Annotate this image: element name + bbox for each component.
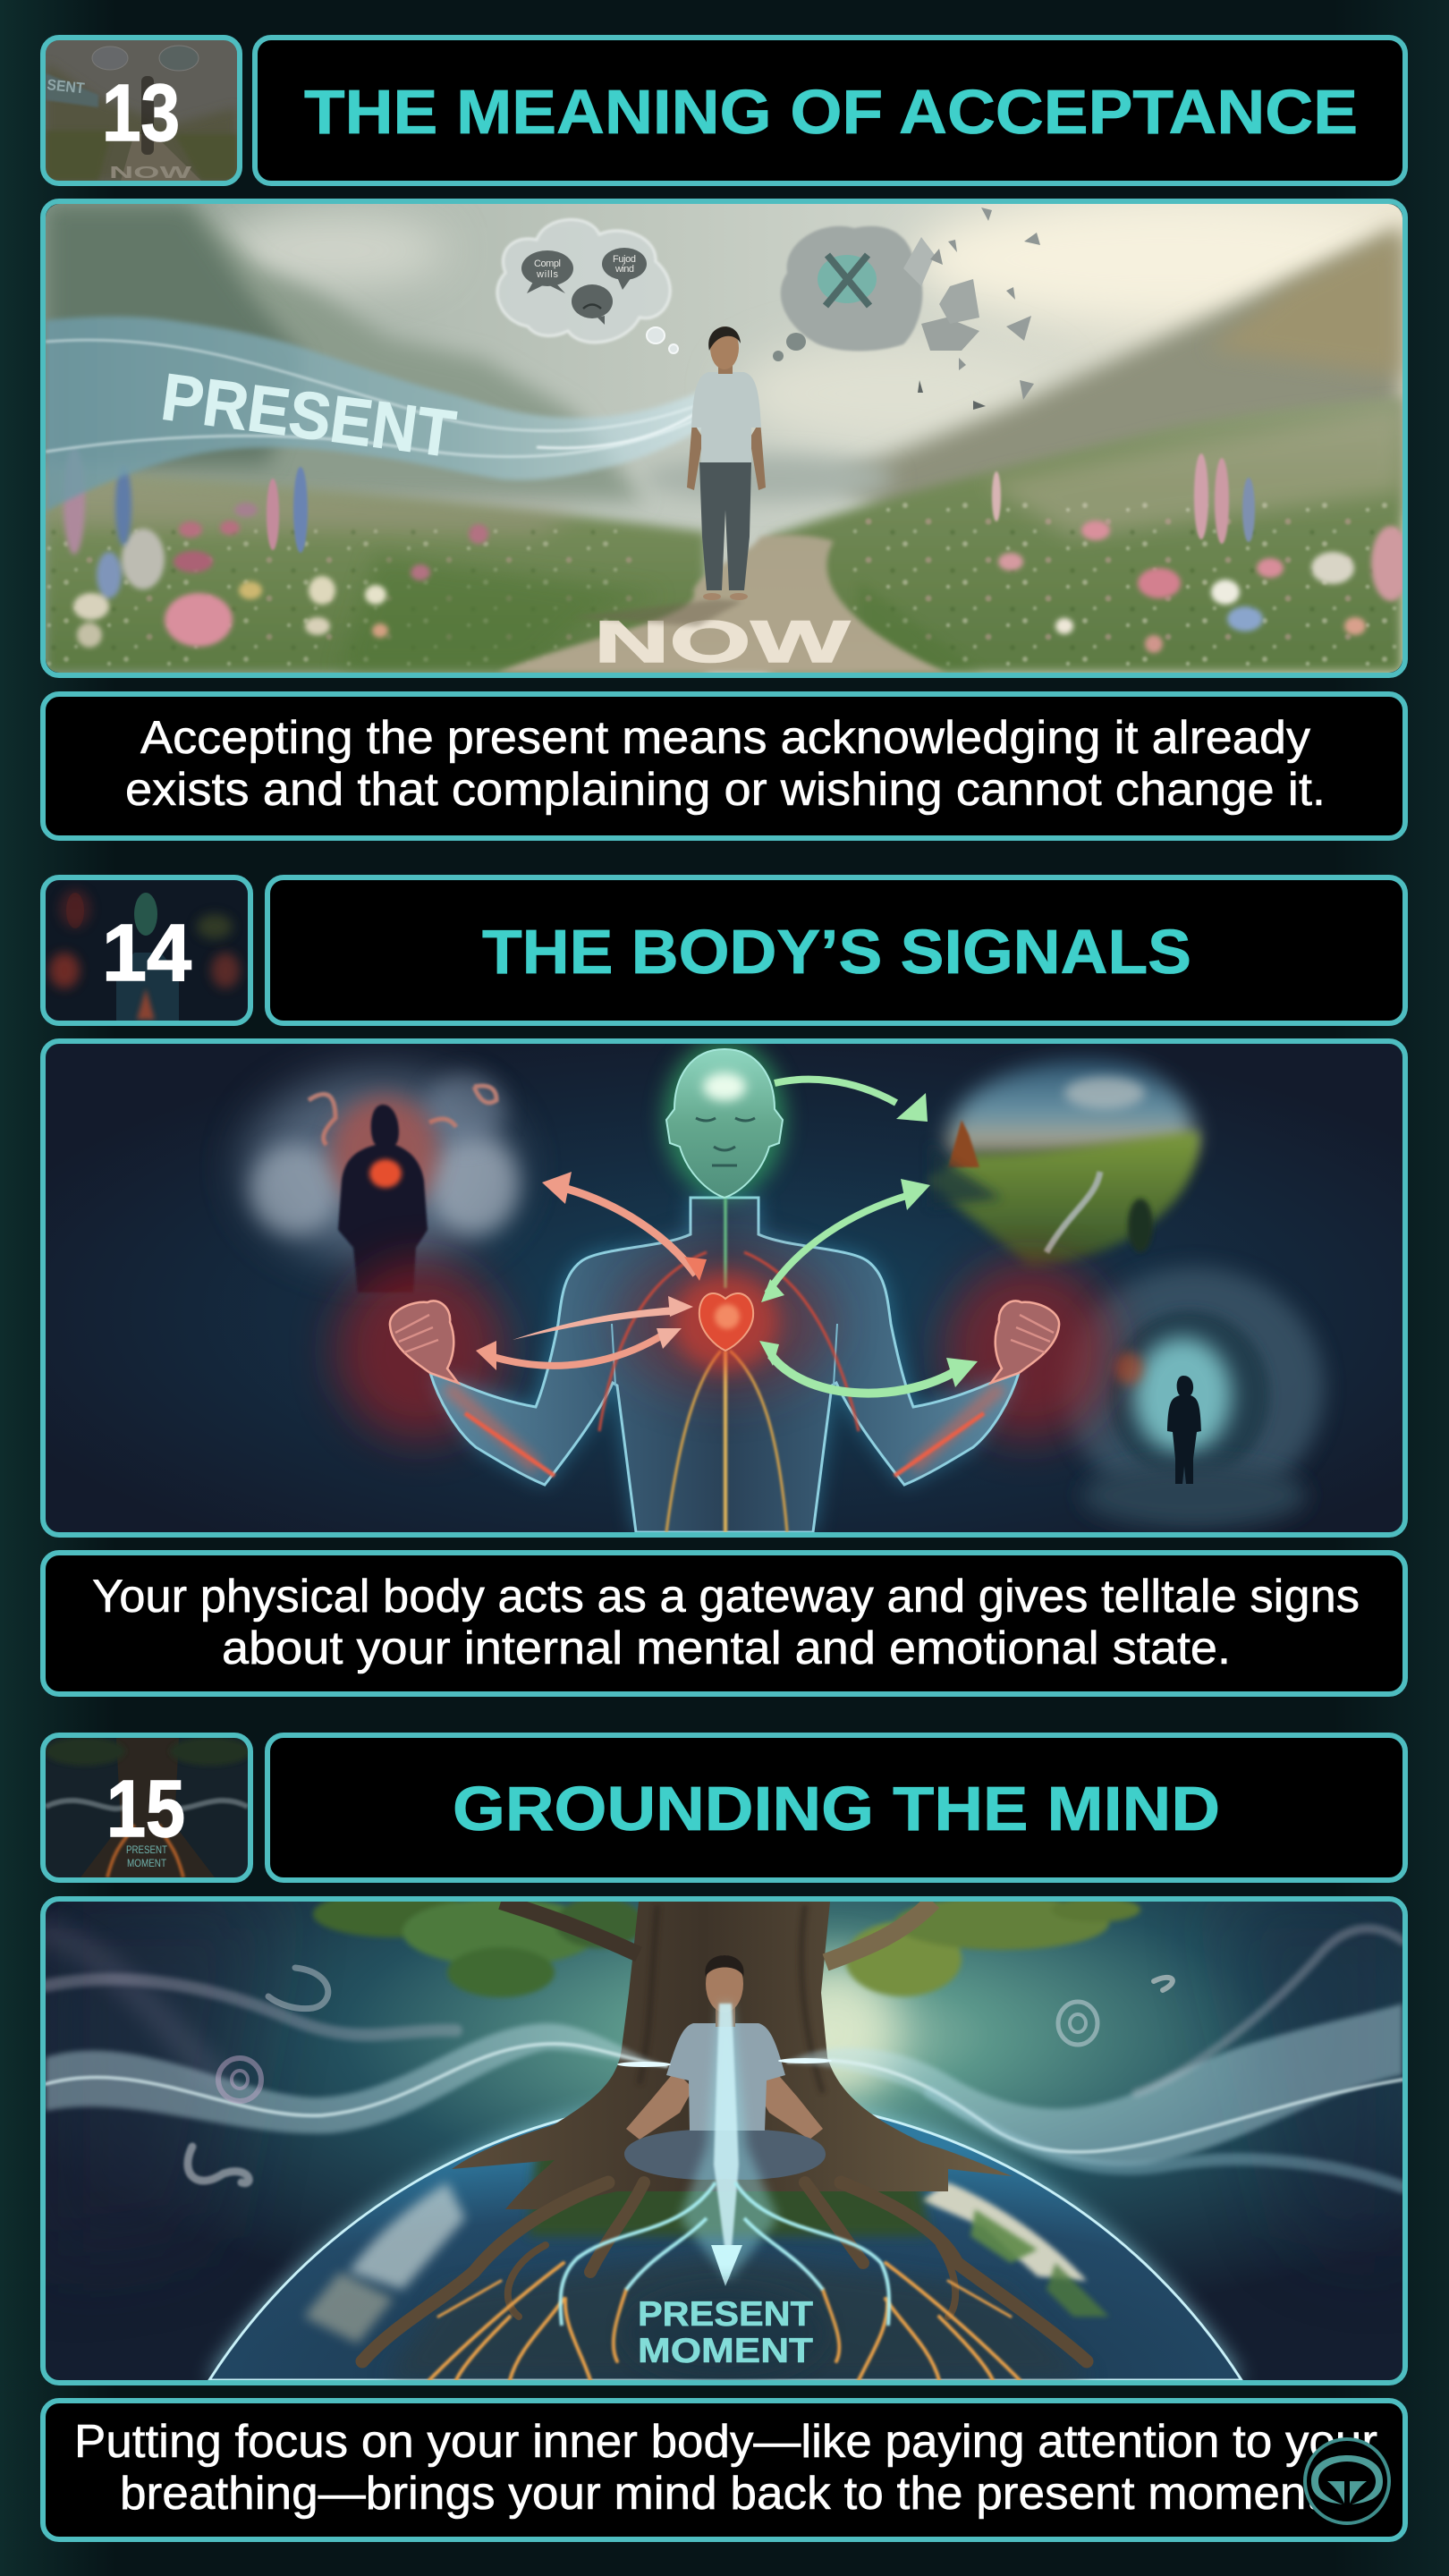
thumbnail badge 14 bbox=[43, 877, 250, 1023]
caption panel 14: about your internal mental and emotional state. bbox=[222, 1623, 1231, 1674]
breath wisps bbox=[46, 1928, 1402, 2187]
label: NOW: NOW bbox=[594, 608, 851, 674]
thumbnail badge 13: SENT bbox=[47, 76, 86, 97]
section 14 bbox=[43, 877, 1405, 1694]
title 15: GROUNDING THE MIND bbox=[453, 1774, 1220, 1843]
heart bbox=[672, 1273, 779, 1371]
caption panel 15: breathing—brings your mind back to the present moment. bbox=[120, 2468, 1333, 2520]
red glows bbox=[335, 1261, 1114, 1440]
number 15: 15 bbox=[106, 1765, 185, 1854]
caption panel 13 bbox=[43, 694, 1405, 838]
person bbox=[572, 326, 766, 626]
title panel 15 bbox=[267, 1735, 1405, 1880]
arrow: storm to heart bbox=[542, 1172, 707, 1281]
thought bubble: complaints: wills bbox=[536, 269, 558, 280]
image panel: body signals bbox=[43, 1039, 1405, 1535]
label: present moment: MOMENT bbox=[638, 2332, 813, 2370]
arrows: fists and heart bbox=[476, 1296, 978, 1394]
caption text 13: Accepting the present means acknowledging it already bbox=[140, 712, 1310, 764]
image panel: meadow and present moment bbox=[43, 197, 1413, 675]
title 13: THE MEANING OF ACCEPTANCE bbox=[304, 77, 1358, 147]
thought bubble: complaints bbox=[497, 219, 678, 353]
vignette: tunnel bbox=[1064, 1267, 1324, 1528]
fists bbox=[390, 1301, 1059, 1467]
title panel 13 bbox=[255, 38, 1405, 183]
dirt path bbox=[497, 535, 946, 673]
arrow: landscape to heart bbox=[761, 1179, 930, 1302]
caption text 14: Your physical body acts as a gateway and gives telltale signs bbox=[92, 1571, 1360, 1623]
vignette: landscape bbox=[930, 1061, 1199, 1266]
lupine spikes bbox=[64, 447, 1255, 555]
meditating person bbox=[624, 1955, 826, 2180]
head bbox=[664, 1039, 785, 1198]
section 13 bbox=[43, 38, 1413, 838]
thumbnail badge 13 bbox=[43, 38, 240, 183]
tree trunk and flare bbox=[452, 1902, 1013, 2209]
label: present moment bbox=[627, 2288, 824, 2377]
body figure bbox=[430, 1198, 1019, 1532]
thought bubble: complaints: Compl bbox=[534, 258, 561, 269]
thumbnail badge 15: PRESENT bbox=[126, 1843, 168, 1856]
earth bbox=[209, 2097, 1241, 2380]
label: PRESENT: PRESENT bbox=[157, 360, 460, 471]
caption text 15: Putting focus on your inner body—like paying attention to your bbox=[74, 2416, 1377, 2468]
image panel: tree, earth and breath bbox=[43, 1891, 1405, 2383]
tree foliage bbox=[313, 1891, 1140, 1997]
glowing orange roots bbox=[429, 2263, 1020, 2380]
arrow: head to landscape bbox=[775, 1080, 928, 1122]
thought bubble: complaints: wind bbox=[614, 264, 634, 275]
thought bubble: complaints: Fujod bbox=[613, 254, 636, 265]
caption panel 15 bbox=[43, 2401, 1405, 2539]
number 14: 14 bbox=[102, 909, 191, 998]
nerves bbox=[465, 1199, 984, 1532]
vignette: storm figure bbox=[246, 1073, 519, 1292]
number 13: 13 bbox=[102, 69, 180, 158]
title panel 14 bbox=[267, 877, 1405, 1023]
title 14: THE BODY’S SIGNALS bbox=[482, 917, 1191, 987]
breath stream and arrow bbox=[561, 2004, 889, 2326]
flowers bbox=[73, 503, 1411, 653]
label: present moment: PRESENT bbox=[638, 2295, 813, 2334]
roots on earth bbox=[362, 2182, 1087, 2361]
thumbnail badge 15: MOMENT bbox=[127, 1857, 167, 1869]
caption panel 13: exists and that complaining or wishing cannot change it. bbox=[125, 764, 1326, 816]
caption panel 14 bbox=[43, 1553, 1405, 1694]
thumbnail badge 13: NOW bbox=[109, 164, 191, 182]
broken thought bubble bbox=[773, 208, 1040, 410]
watermark logo bbox=[1305, 2439, 1389, 2523]
wind ribbon bbox=[46, 317, 723, 512]
thumbnail badge 15 bbox=[43, 1735, 250, 1880]
section 15 bbox=[43, 1735, 1405, 2539]
